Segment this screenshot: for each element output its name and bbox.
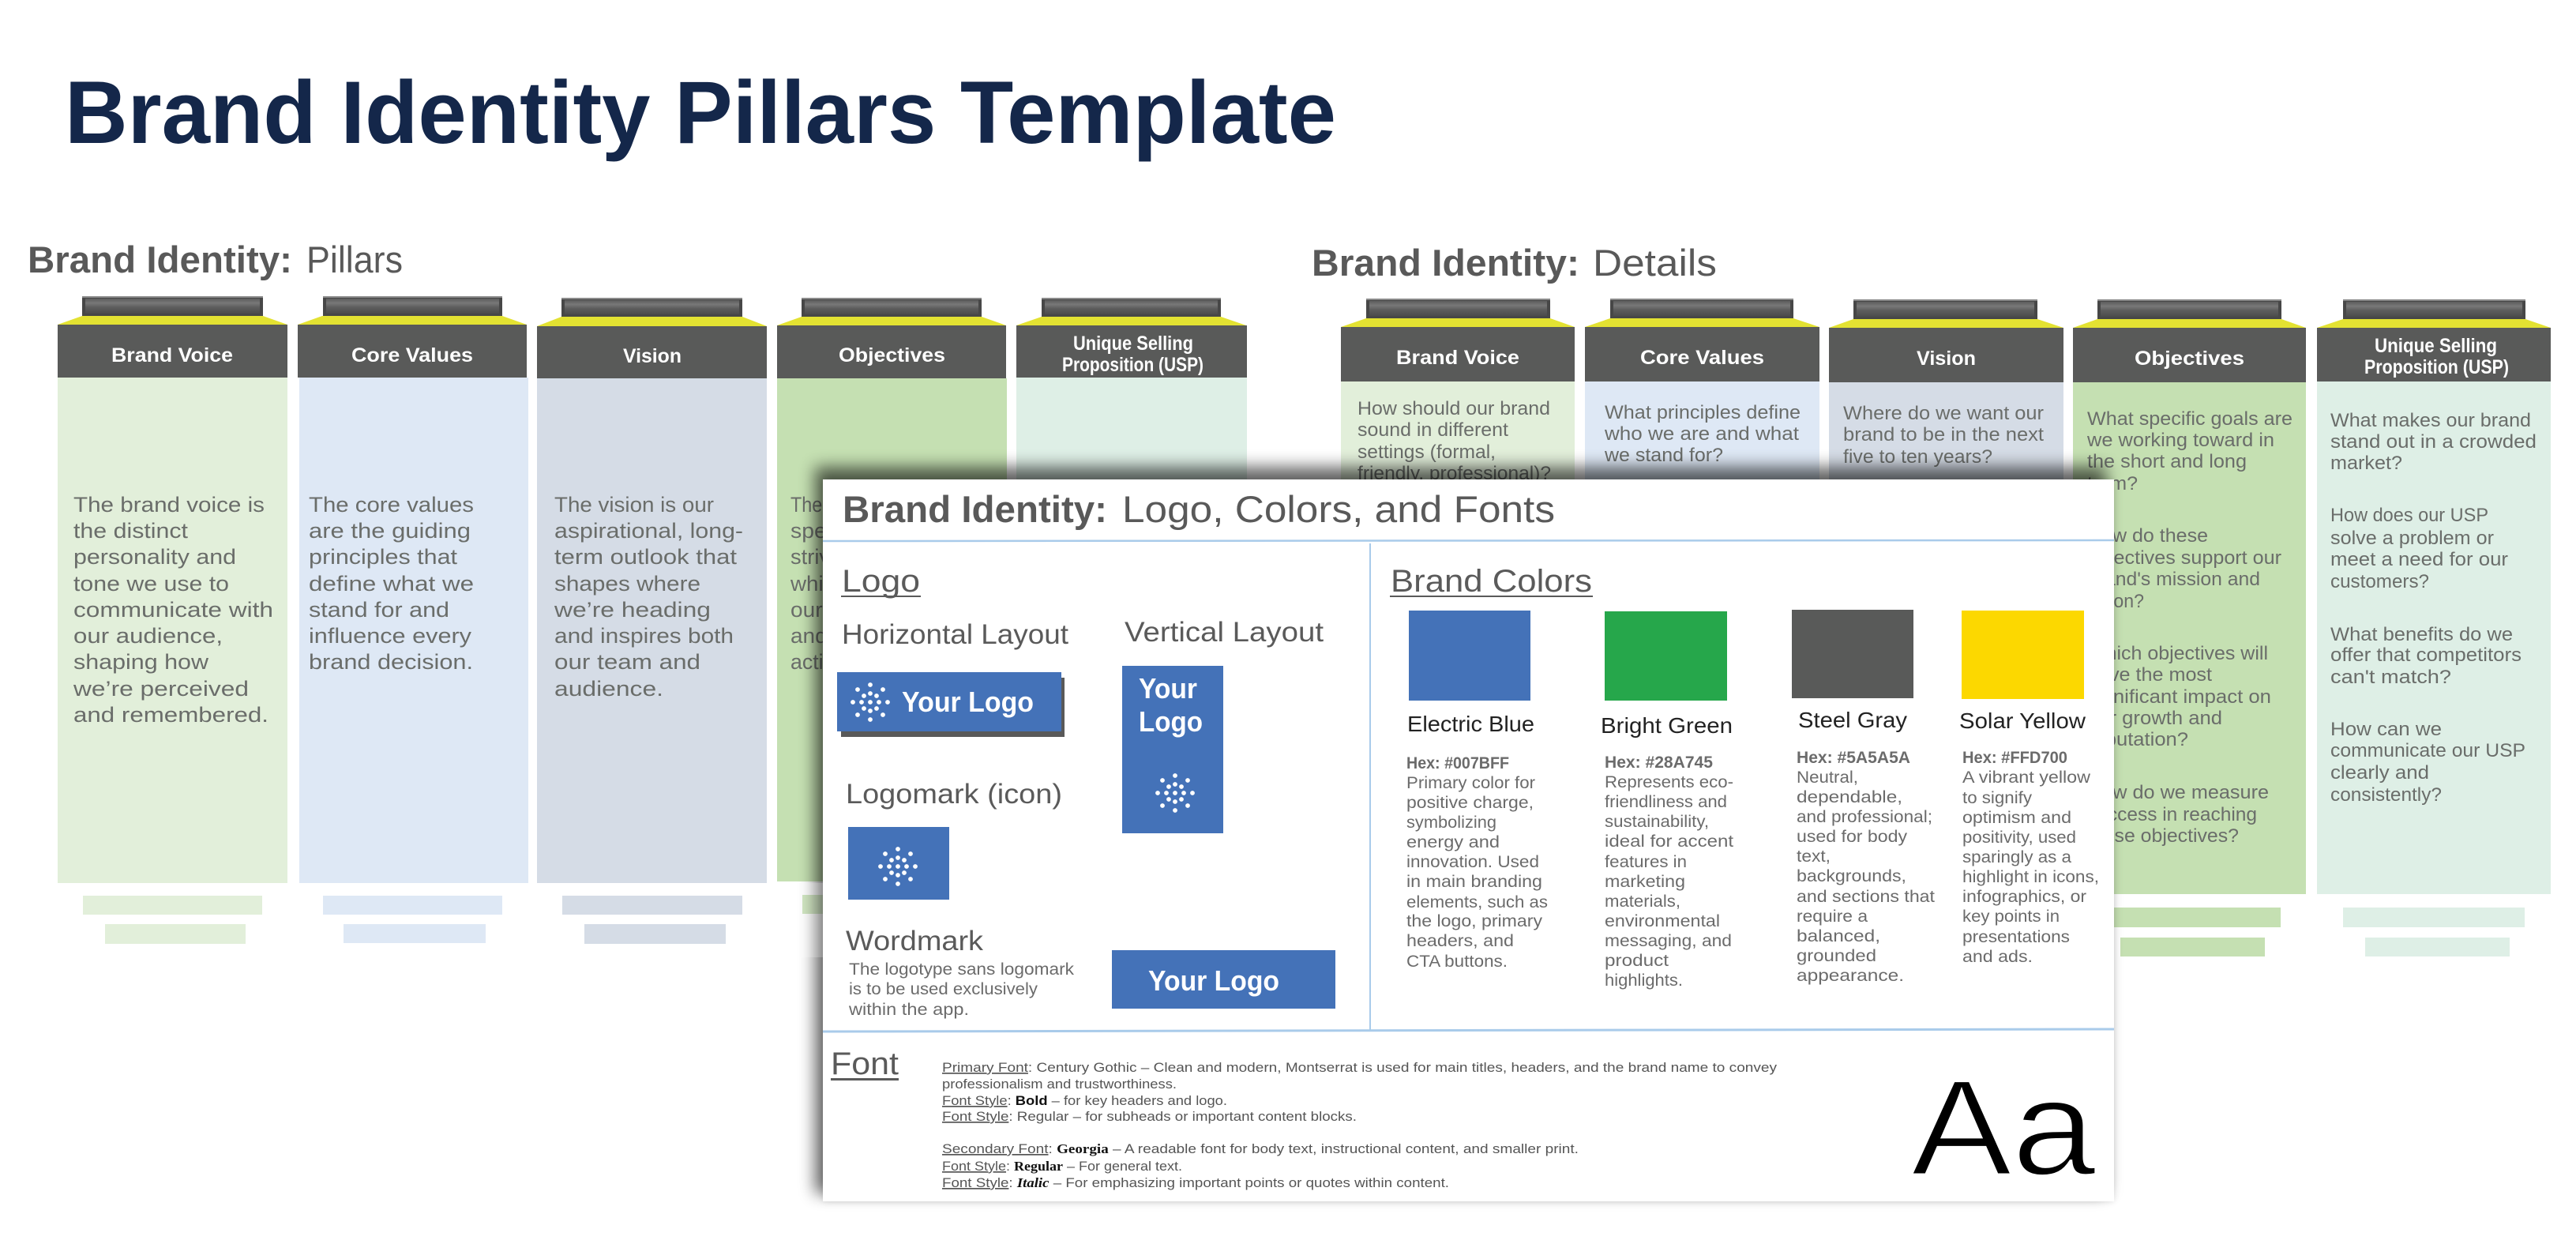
detail: usp: Proposition (USP) (2364, 356, 2509, 378)
pillar: objectives: Objectives (839, 344, 945, 366)
color: steel gray: text, (1797, 847, 1831, 866)
pillar: brand voice: personality and (73, 545, 236, 569)
detail: usp: can't match? (2330, 667, 2451, 688)
detail: vision: brand to be in the next (1843, 424, 2044, 445)
pillar: vision: we’re heading (554, 598, 711, 622)
color: steel gray: used for body (1797, 827, 1907, 846)
detail: usp: stand out in a crowded (2330, 431, 2537, 453)
detail: vision: five to ten years? (1843, 446, 1992, 468)
pillar: core values: define what we (309, 572, 474, 596)
color: bright green: materials, (1605, 892, 1680, 911)
color: steel gray: grounded (1797, 946, 1876, 965)
pillar: usp: Unique Selling (1073, 333, 1193, 355)
color: steel gray: Steel Gray (1798, 708, 1907, 732)
detail: usp: offer that competitors (2330, 645, 2522, 666)
color: solar yellow (1959, 611, 2099, 966)
pillar: brand voice: shaping how (73, 650, 209, 674)
logo: vertical (1122, 666, 1223, 833)
section: logo: Vertical Layout (1125, 617, 1324, 648)
detail: objectives: these objectives? (2087, 825, 2239, 847)
color: steel gray: Hex: #5A5A5A (1797, 748, 1910, 767)
detail: objectives: significant impact on (2087, 686, 2271, 708)
detail: objectives: term? (2087, 473, 2138, 494)
detail: objectives: Objectives (2135, 348, 2244, 370)
detail: usp: consistently? (2330, 784, 2442, 806)
color: electric blue: CTA buttons. (1406, 952, 1508, 971)
color: electric blue: headers, and (1406, 931, 1514, 950)
color: solar yellow: infographics, or (1962, 887, 2086, 906)
pillar: core values: brand decision. (309, 650, 473, 674)
color: solar yellow: to signify (1962, 788, 2032, 807)
heading: details: Details (1593, 242, 1717, 284)
color: electric blue: Hex: #007BFF (1406, 754, 1509, 772)
detail: brand voice: How should our brand (1357, 398, 1550, 419)
pillar: objectives: specific goals we (790, 519, 960, 543)
section: logo (837, 564, 1335, 1019)
color: electric blue: innovation. Used (1406, 852, 1539, 871)
color: steel gray: and professional; (1797, 807, 1932, 826)
detail: objectives (2073, 299, 2306, 956)
color: steel gray: Neutral, (1797, 768, 1858, 787)
pillar: vision: shapes where (554, 572, 700, 596)
logo: vertical: Your (1139, 672, 1197, 705)
detail: objectives: have the most (2087, 664, 2212, 686)
color: solar yellow: and ads. (1962, 947, 2033, 966)
detail: usp: communicate our USP (2330, 740, 2525, 761)
color: solar yellow: Solar Yellow (1959, 708, 2086, 733)
detail: usp: Unique Selling (2375, 335, 2497, 357)
color: bright green: Bright Green (1601, 713, 1733, 738)
color: bright green: messaging, and (1605, 931, 1732, 950)
color: bright green (1601, 611, 1733, 990)
section: font (831, 1047, 2096, 1204)
detail: objectives: success in reaching (2087, 804, 2257, 825)
color: bright green: product (1605, 951, 1669, 970)
detail: objectives: How do we measure (2087, 782, 2269, 803)
color: solar yellow: key points in (1962, 907, 2060, 926)
logo: wordmark: Wordmark (846, 926, 984, 956)
color: electric blue: Primary color for (1406, 773, 1535, 792)
pillar: core values: influence every (309, 624, 472, 648)
color: steel gray: backgrounds, (1797, 866, 1906, 885)
color: solar yellow: Hex: #FFD700 (1962, 748, 2067, 767)
heading: details (1312, 242, 1717, 284)
color: electric blue: positive charge, (1406, 793, 1534, 812)
heading: logo colors fonts: Brand Identity: (843, 488, 1107, 530)
pillar: brand voice: Brand Voice (111, 344, 233, 366)
pillar: core values: Core Values (351, 344, 473, 366)
detail: core values: What principles define (1605, 402, 1801, 423)
logo: horizontal: Your Logo (902, 686, 1034, 718)
detail: objectives: reputation? (2087, 729, 2188, 750)
detail: usp: How does our USP (2330, 505, 2488, 526)
detail: core values (1585, 299, 1819, 618)
color: electric blue: symbolizing (1406, 813, 1496, 832)
panel: pillars (28, 239, 1247, 944)
section: logo: Logo (842, 564, 920, 599)
color: bright green: highlights. (1605, 971, 1683, 990)
pillar: objectives: actions. (790, 650, 863, 674)
detail: usp: How can we (2330, 719, 2442, 740)
color: electric blue: energy and (1406, 832, 1500, 851)
pillar: objectives: and daily (790, 624, 880, 648)
pillar: vision: aspirational, long- (554, 519, 743, 543)
color: bright green: Represents eco- (1605, 772, 1733, 791)
detail: usp: solve a problem or (2330, 528, 2494, 549)
detail: brand voice: friendly, professional)? (1357, 463, 1551, 484)
color: bright green: sustainability, (1605, 812, 1709, 831)
detail: objectives: How do these (2087, 525, 2208, 547)
logo: wordmark: Your Logo (1148, 964, 1279, 997)
detail: core values: who we are and what (1604, 423, 1799, 445)
font descriptions: Secondary Font : Georgia – A readable font for body text, instructional content, and smaller print. (942, 1141, 1579, 1156)
section: brand colors: Brand Colors (1391, 564, 1592, 599)
color: steel gray: and sections that (1797, 887, 1935, 906)
detail: brand voice: settings (formal, (1357, 442, 1496, 463)
logo: logomark (846, 779, 1062, 900)
pillar: brand voice (58, 296, 287, 944)
font descriptions (942, 1060, 1778, 1190)
detail: vision: Where do we want our (1843, 403, 2044, 424)
detail: objectives: we working toward in (2086, 430, 2274, 451)
detail: usp: meet a need for our (2330, 549, 2508, 570)
color: bright green: ideal for accent (1605, 832, 1733, 851)
pillar: brand voice: we’re perceived (73, 677, 249, 701)
pillar: core values: The core values (309, 493, 474, 517)
color: solar yellow: sparingly as a (1962, 847, 2071, 866)
color: electric blue: in main branding (1406, 872, 1542, 891)
logo: wordmark: within the app. (848, 1000, 969, 1019)
pillar: brand voice: communicate with (73, 598, 273, 622)
color: steel gray: appearance. (1797, 966, 1904, 985)
color: steel gray: balanced, (1797, 926, 1880, 945)
font sample: Aa: Aa (1911, 1052, 2096, 1204)
font descriptions: Font Style : Italic – For emphasizing important points or quotes within content. (942, 1175, 1449, 1190)
heading: details: Brand Identity: (1312, 242, 1579, 284)
detail: objectives: the short and long (2087, 451, 2247, 472)
pillar: brand voice: our audience, (73, 624, 223, 648)
pillar: objectives: which guide how (790, 572, 952, 596)
detail: vision (1829, 299, 2063, 619)
color: steel gray: dependable, (1797, 787, 1902, 806)
detail: usp: customers? (2330, 571, 2429, 592)
pillar: objectives: our strategies (790, 598, 925, 622)
detail: usp: clearly and (2330, 762, 2429, 784)
font descriptions: professionalism and trustworthiness. (942, 1077, 1177, 1092)
pillar: brand voice: the distinct (73, 519, 189, 543)
detail: brand voice: sound in different (1357, 419, 1508, 441)
logo: wordmark (846, 926, 1335, 1019)
color: solar yellow: optimism and (1962, 808, 2071, 827)
logo: wordmark: is to be used exclusively (849, 979, 1038, 998)
pillar: core values (298, 296, 528, 943)
detail: usp: market? (2330, 453, 2402, 474)
color: electric blue: elements, such as (1406, 893, 1548, 911)
color: bright green: environmental (1605, 911, 1720, 930)
heading: pillars: Brand Identity: (28, 239, 292, 280)
pillar: vision (537, 298, 767, 944)
logo: wordmark: The logotype sans logomark (849, 960, 1074, 979)
heading: pillars: Pillars (306, 239, 403, 280)
detail: brand voice (1341, 299, 1575, 618)
pillar: vision: term outlook that (554, 545, 738, 569)
detail: objectives: our growth and (2087, 708, 2222, 729)
font descriptions: Font Style : Bold – for key headers and logo. (942, 1093, 1227, 1108)
detail: core values: we stand for? (1604, 445, 1723, 466)
pillar: core values: principles that (309, 545, 458, 569)
font descriptions: Font Style : Regular – for subheads or important content blocks. (942, 1109, 1357, 1124)
pillar: objectives: The objectives are the (790, 493, 972, 517)
logo: vertical: Logo (1139, 705, 1203, 738)
detail: usp: What makes our brand (2330, 410, 2531, 431)
panel: logo, colors and fonts (802, 467, 2114, 1204)
pillar: usp (1016, 298, 1247, 614)
heading: logo colors fonts (843, 488, 1555, 530)
font descriptions: Primary Font : Century Gothic – Clean and modern, Montserrat is used for main titles, headers, and the brand name to convey (942, 1060, 1778, 1075)
pillar: vision: audience. (554, 677, 663, 701)
detail: usp (2317, 299, 2551, 956)
detail: vision: Vision (1917, 348, 1976, 370)
detail: core values: Core Values (1640, 347, 1764, 369)
pillar: brand voice: The brand voice is (73, 493, 265, 517)
section: brand colors (1390, 564, 2099, 990)
color: electric blue: the logo, primary (1406, 911, 1542, 930)
detail: objectives: Which objectives will (2087, 643, 2268, 664)
pillar: vision: and inspires both (554, 624, 734, 648)
section: font: Font (831, 1047, 899, 1081)
pillar: objectives: strive to achieve, (790, 545, 952, 569)
pillar: usp: Proposition (USP) (1062, 354, 1204, 376)
color: bright green: features in (1605, 852, 1687, 871)
detail: objectives: vision? (2087, 591, 2144, 612)
detail: brand voice: Brand Voice (1396, 347, 1519, 369)
detail: objectives: objectives support our (2087, 547, 2281, 569)
color: solar yellow: A vibrant yellow (1962, 768, 2090, 787)
color: electric blue: Electric Blue (1407, 712, 1534, 736)
pillar: vision: our team and (554, 650, 700, 674)
pillar: vision: Vision (623, 345, 682, 367)
panel: details (1312, 242, 2551, 956)
color: steel gray (1792, 610, 1935, 985)
title: Brand Identity Pillars Template (65, 63, 1336, 162)
logo: horizontal (837, 672, 1065, 737)
heading: pillars (28, 239, 403, 280)
detail: objectives: What specific goals are (2087, 408, 2292, 430)
color: bright green: marketing (1605, 872, 1685, 891)
color: bright green: friendliness and (1605, 792, 1727, 811)
heading: logo colors fonts: Logo, Colors, and Fonts (1122, 488, 1555, 530)
font descriptions: Font Style : Regular – For general text. (942, 1159, 1182, 1174)
color: electric blue (1406, 611, 1548, 971)
color: bright green: Hex: #28A745 (1605, 753, 1713, 772)
pillar: objectives (777, 298, 1007, 943)
color: steel gray: require a (1797, 907, 1868, 926)
pillar: brand voice: and remembered. (73, 703, 268, 727)
detail: usp: What benefits do we (2330, 624, 2513, 645)
color: solar yellow: presentations (1962, 927, 2070, 946)
logo: logomark: Logomark (icon) (846, 779, 1062, 810)
section: logo: Horizontal Layout (842, 619, 1068, 650)
pillar: core values: are the guiding (309, 519, 471, 543)
color: solar yellow: highlight in icons, (1962, 867, 2099, 886)
pillar: vision: The vision is our (554, 493, 714, 517)
pillar: core values: stand for and (309, 598, 449, 622)
detail: objectives: brand's mission and (2087, 569, 2260, 590)
color: solar yellow: positivity, used (1962, 828, 2076, 847)
pillar: brand voice: tone we use to (73, 572, 229, 596)
